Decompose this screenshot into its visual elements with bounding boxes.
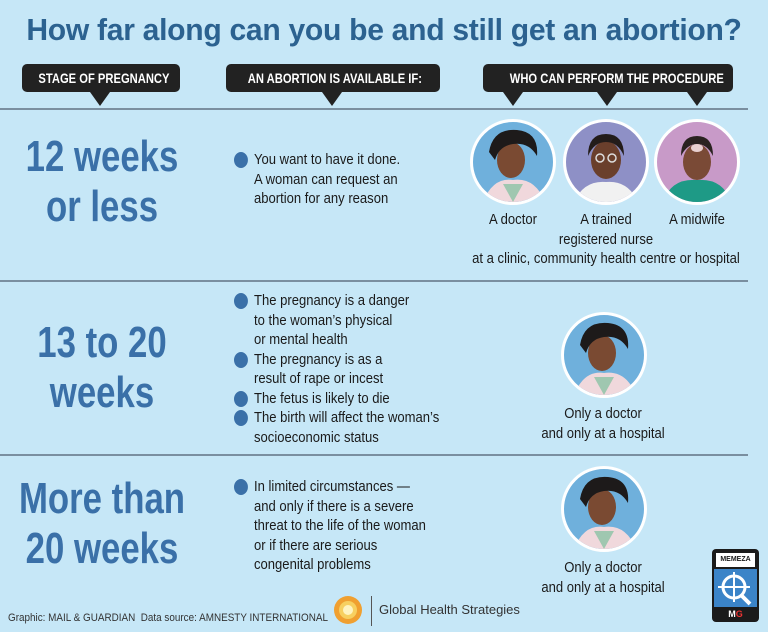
header tab: abortion available if	[226, 64, 440, 106]
text: row 2 conditions: result of rape or incest	[254, 370, 383, 387]
text: row 1 conditions: You want to have it done.	[254, 151, 400, 168]
caption: row 2: Only a doctor	[564, 405, 642, 422]
text: row 3 conditions: and only if there is a severe	[254, 498, 414, 514]
text: row 3 conditions: congenital problems	[254, 556, 371, 573]
text: row 3 conditions	[234, 478, 426, 573]
text: row 2 conditions: The fetus is likely to die	[254, 390, 390, 406]
stage: 13 to 20 weeks: weeks	[50, 368, 154, 417]
caption: row 3: Only a doctor	[564, 559, 642, 576]
icon: M&G logo: MG	[728, 609, 743, 619]
stage: 12 weeks or less: 12 weeks	[26, 132, 178, 181]
stage: 12 weeks or less: or less	[46, 182, 158, 231]
header tab: who can perform: WHO CAN PERFORM THE PROCEDURE	[510, 70, 724, 86]
stage: 12 weeks or less	[26, 132, 178, 231]
text: row 2 conditions: socioeconomic status	[254, 428, 379, 446]
text: row 1 conditions: abortion for any reason	[254, 190, 388, 207]
icon: nurse portrait	[563, 119, 649, 205]
icon: doctor portrait row 2	[561, 312, 647, 398]
text: row 2 conditions: The pregnancy is as a	[254, 350, 382, 368]
text: row 1 conditions	[234, 151, 400, 207]
icon: global health strategies logo	[334, 596, 520, 626]
header tab: who can perform	[483, 64, 733, 106]
caption: location row 1: at a clinic, community health centre or hospital	[472, 250, 740, 267]
icon: global health strategies logo: Global Health Strategies	[379, 602, 520, 617]
header tab: stage of pregnancy	[22, 64, 180, 106]
caption: nurse: A trained	[580, 211, 632, 228]
text: row 2 conditions: or mental health	[254, 331, 348, 348]
stage: more than 20 weeks: More than	[19, 474, 185, 523]
text: row 2 conditions: The pregnancy is a danger	[254, 292, 409, 309]
text: row 2 conditions: The birth will affect the woman’s	[254, 409, 439, 426]
icon: M&G logo: MEMEZA	[720, 556, 751, 563]
header tab: stage of pregnancy: STAGE OF PREGNANCY	[38, 70, 169, 86]
icon: midwife portrait	[654, 119, 740, 205]
text: row 3 conditions: In limited circumstances —	[254, 478, 410, 495]
caption: row 2	[541, 405, 665, 442]
caption: row 3: and only at a hospital	[541, 578, 665, 596]
header tab: abortion available if: AN ABORTION IS AVAILABLE IF:	[248, 70, 422, 86]
caption: doctor: A doctor	[489, 211, 537, 228]
text: row 1 conditions: A woman can request an	[254, 170, 398, 188]
text: row 3 conditions: or if there are serious	[254, 536, 377, 554]
icon: doctor portrait row 3	[561, 466, 647, 552]
text: row 2 conditions: to the woman’s physical	[254, 312, 392, 328]
footer credit: Graphic: MAIL & GUARDIAN Data source: AMNESTY INTERNATIONAL	[8, 612, 328, 624]
stage: 13 to 20 weeks: 13 to 20	[37, 318, 167, 367]
stage: 13 to 20 weeks	[37, 318, 167, 417]
stage: more than 20 weeks: 20 weeks	[26, 524, 178, 573]
caption: row 2: and only at a hospital	[541, 424, 665, 442]
caption: midwife: A midwife	[669, 211, 725, 228]
icon: doctor portrait	[470, 119, 556, 205]
text: row 2 conditions	[234, 292, 439, 446]
title: How far along can you be and still get an abortion?	[26, 12, 742, 47]
text: row 3 conditions: threat to the life of the woman	[254, 517, 426, 534]
caption: row 3	[541, 559, 665, 596]
stage: more than 20 weeks	[19, 474, 185, 573]
caption: nurse	[559, 211, 653, 248]
caption: nurse: registered nurse	[559, 230, 653, 248]
icon: M&G logo	[712, 549, 759, 622]
